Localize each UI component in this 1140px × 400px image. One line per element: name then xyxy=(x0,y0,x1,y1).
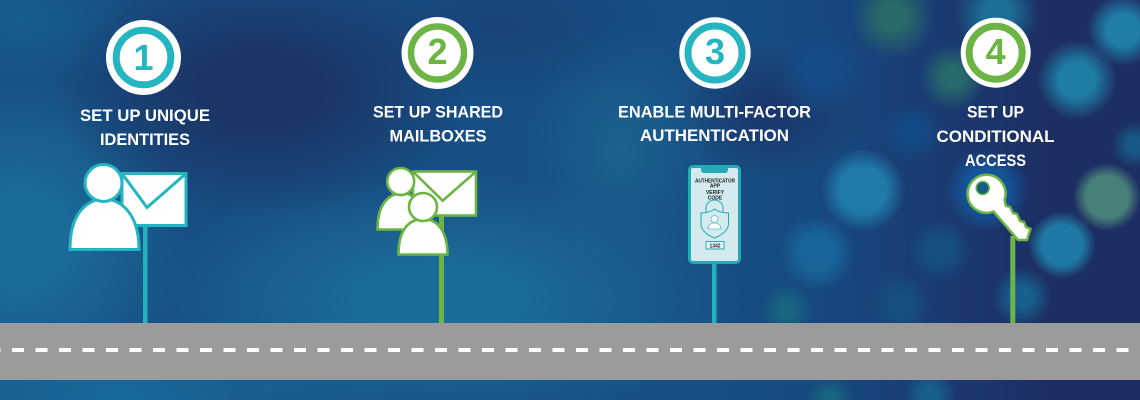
step 4 number badge: 4 xyxy=(986,31,1006,72)
step 3 heading: ENABLE MULTI-FACTOR xyxy=(618,102,811,122)
icon: authenticator phone: CODE xyxy=(708,196,723,202)
icon: back person xyxy=(378,168,426,230)
icon: envelope xyxy=(413,172,476,216)
step 2 xyxy=(373,17,503,323)
step 4 number badge xyxy=(961,18,1031,88)
step 2 heading: SET UP SHARED xyxy=(373,102,503,122)
step 2 heading: MAILBOXES xyxy=(390,126,486,146)
icon: authenticator phone xyxy=(688,166,741,262)
step 3 signpost pole xyxy=(712,263,716,323)
step 3 number badge: 3 xyxy=(705,31,725,72)
icon: key xyxy=(968,175,1030,240)
icon: authenticator phone: 1342 xyxy=(709,244,721,250)
step 4 heading: SET UP xyxy=(967,103,1024,122)
step 1 heading: IDENTITIES xyxy=(100,130,190,149)
icon: front person xyxy=(398,193,448,254)
icon: envelope xyxy=(122,174,186,226)
step 1 heading: SET UP UNIQUE xyxy=(80,106,210,125)
step 4 signpost pole xyxy=(1010,236,1015,323)
step 3 xyxy=(618,17,811,323)
step 2 number badge: 2 xyxy=(427,31,448,72)
icon: authenticator phone: APP xyxy=(710,184,721,190)
step 1 number badge: 1 xyxy=(133,37,154,78)
step 4 heading: ACCESS xyxy=(965,151,1026,170)
icon: person xyxy=(70,164,139,250)
icon: authenticator phone: AUTHENTICATOR xyxy=(695,178,735,184)
step 1 signpost pole xyxy=(143,225,148,323)
step 1 number badge xyxy=(106,20,181,95)
step 2 number badge xyxy=(402,17,474,89)
step 3 number badge xyxy=(679,17,751,89)
icon: authenticator phone: VERIFY xyxy=(706,190,725,196)
road xyxy=(0,323,1140,380)
step 4 heading: CONDITIONAL xyxy=(936,127,1054,146)
step 2 signpost pole xyxy=(439,216,444,323)
step 3 heading: AUTHENTICATION xyxy=(640,126,789,145)
step 4 xyxy=(936,18,1054,323)
step 1 xyxy=(70,20,210,323)
